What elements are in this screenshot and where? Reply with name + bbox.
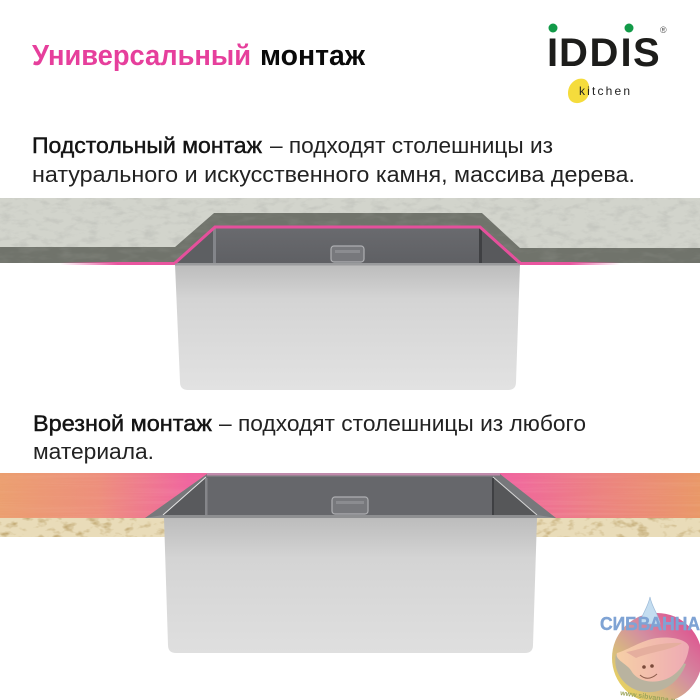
watermark tub bbox=[615, 637, 689, 692]
text block: drop-in description: Врезной монтаж bbox=[33, 411, 212, 436]
chipboard edge bbox=[0, 518, 700, 537]
illustration: drop-in sink in laminated countertop bbox=[0, 473, 700, 653]
countertop cut edge bbox=[0, 213, 700, 263]
watermark name: СИБВАННА bbox=[600, 614, 700, 634]
countertop stone surface bbox=[0, 198, 700, 249]
watermark: Sibvanna bbox=[600, 597, 700, 700]
sink rim bbox=[145, 474, 556, 518]
logo wordmark: IDDIS bbox=[547, 31, 660, 75]
laminate surface bbox=[0, 473, 700, 518]
logo: IDDIS kitchen: kitchen bbox=[579, 84, 630, 98]
watermark water drop bbox=[640, 597, 660, 624]
text block: undermount description: натурального и искусственного камня, массива дерева. bbox=[32, 162, 635, 187]
sink interior bbox=[163, 477, 537, 515]
title: монтаж bbox=[260, 40, 366, 72]
text block: drop-in description: – подходят столешницы из любого bbox=[219, 411, 586, 436]
sink rim bbox=[175, 263, 520, 266]
sink body bbox=[164, 518, 537, 653]
watermark gradient circle bbox=[612, 613, 700, 700]
text block: undermount description bbox=[32, 133, 635, 187]
text block: drop-in description bbox=[33, 411, 586, 464]
illustration: undermount sink in stone countertop bbox=[0, 198, 700, 390]
logo: IDDIS kitchen bbox=[547, 24, 667, 103]
title bbox=[32, 40, 366, 72]
text block: drop-in description: материала. bbox=[33, 439, 154, 464]
text block: undermount description: Подстольный монтаж bbox=[32, 133, 262, 158]
logo: IDDIS kitchen: ® bbox=[660, 25, 667, 35]
sink body bbox=[175, 264, 520, 390]
logo yellow blob bbox=[568, 79, 589, 103]
sink interior bbox=[175, 226, 520, 263]
rim front edge bbox=[145, 515, 556, 518]
title: Универсальный bbox=[32, 40, 251, 72]
drain overflow handle bbox=[332, 497, 368, 514]
pink mounting line bbox=[60, 227, 620, 265]
text block: undermount description: – подходят столешницы из bbox=[270, 133, 553, 158]
drain overflow handle bbox=[331, 246, 364, 262]
